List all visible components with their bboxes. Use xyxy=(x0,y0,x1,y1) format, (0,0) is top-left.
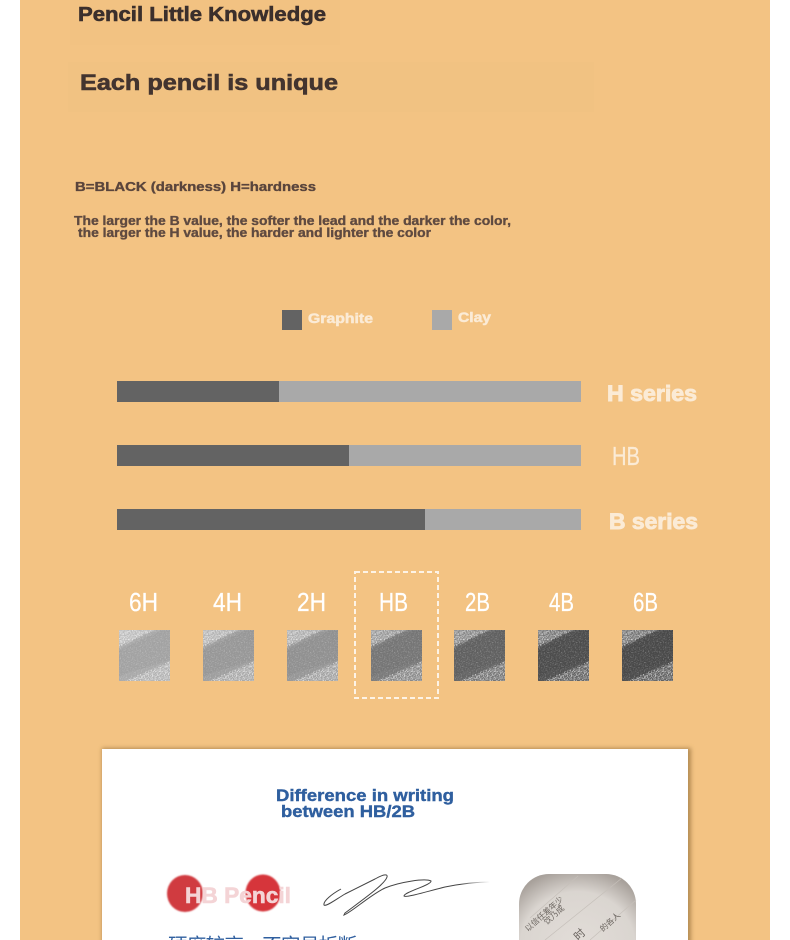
bar: B series xyxy=(117,509,698,534)
text: explanation of values: the larger the H value, the harder and lighter the color xyxy=(78,226,431,240)
bar chart: graphite and clay proportions xyxy=(117,381,698,534)
panel: writing difference card xyxy=(102,748,691,940)
swatch: 2H xyxy=(287,587,338,681)
bar: HB xyxy=(117,441,640,471)
text: explanation of values: The larger the B value, the softer the lead and the darker the color, xyxy=(74,214,511,228)
text: explanation of values xyxy=(74,214,511,240)
heading: pencil little knowledge: Pencil Little Knowledge xyxy=(78,3,326,26)
heading: difference in writing: between HB/2B xyxy=(281,802,415,821)
swatch: 2B xyxy=(454,587,505,681)
bar: H series: H series xyxy=(607,381,697,406)
swatch: 4H: 4H xyxy=(213,587,242,617)
photo: handwriting on paper xyxy=(519,874,636,940)
photo: handwriting on paper: 的各人 xyxy=(598,910,622,933)
swatch: 4H xyxy=(203,587,254,681)
swatch: 6B xyxy=(622,587,673,681)
bar: HB: HB xyxy=(612,441,640,471)
swatch: 2H: 2H xyxy=(297,587,326,617)
legend: graphite and clay: Clay xyxy=(458,309,491,325)
photo: handwriting on paper: 以信任差年少 xyxy=(523,894,565,933)
bar: H series xyxy=(117,381,697,406)
swatch: 4B: 4B xyxy=(549,587,574,617)
swatch: 6B: 6B xyxy=(633,587,658,617)
bar: B series: B series xyxy=(609,509,698,534)
grade swatches xyxy=(119,572,673,698)
swatch: 2B: 2B xyxy=(465,587,490,617)
heading: difference in writing xyxy=(276,786,454,821)
legend: graphite and clay xyxy=(282,309,491,330)
swatch: HB highlighted xyxy=(355,572,438,698)
heading: difference in writing: Difference in writing xyxy=(276,786,454,805)
swatch: 6H: 6H xyxy=(129,587,158,617)
text: definition of B and H: B=BLACK (darkness) H=hardness xyxy=(75,179,316,194)
heading: each pencil is unique: Each pencil is unique xyxy=(80,70,338,95)
handwriting sample stroke xyxy=(324,875,490,915)
legend: graphite and clay: Graphite xyxy=(308,310,373,326)
swatch: 4B xyxy=(538,587,589,681)
swatch: HB highlighted: HB xyxy=(379,587,408,617)
swatch: 6H xyxy=(119,587,170,681)
photo: handwriting on paper: 饮乃成 xyxy=(542,903,566,926)
label: HB pencil with red dots: HB Pencil xyxy=(185,883,291,908)
label: HB pencil with red dots xyxy=(167,874,291,912)
